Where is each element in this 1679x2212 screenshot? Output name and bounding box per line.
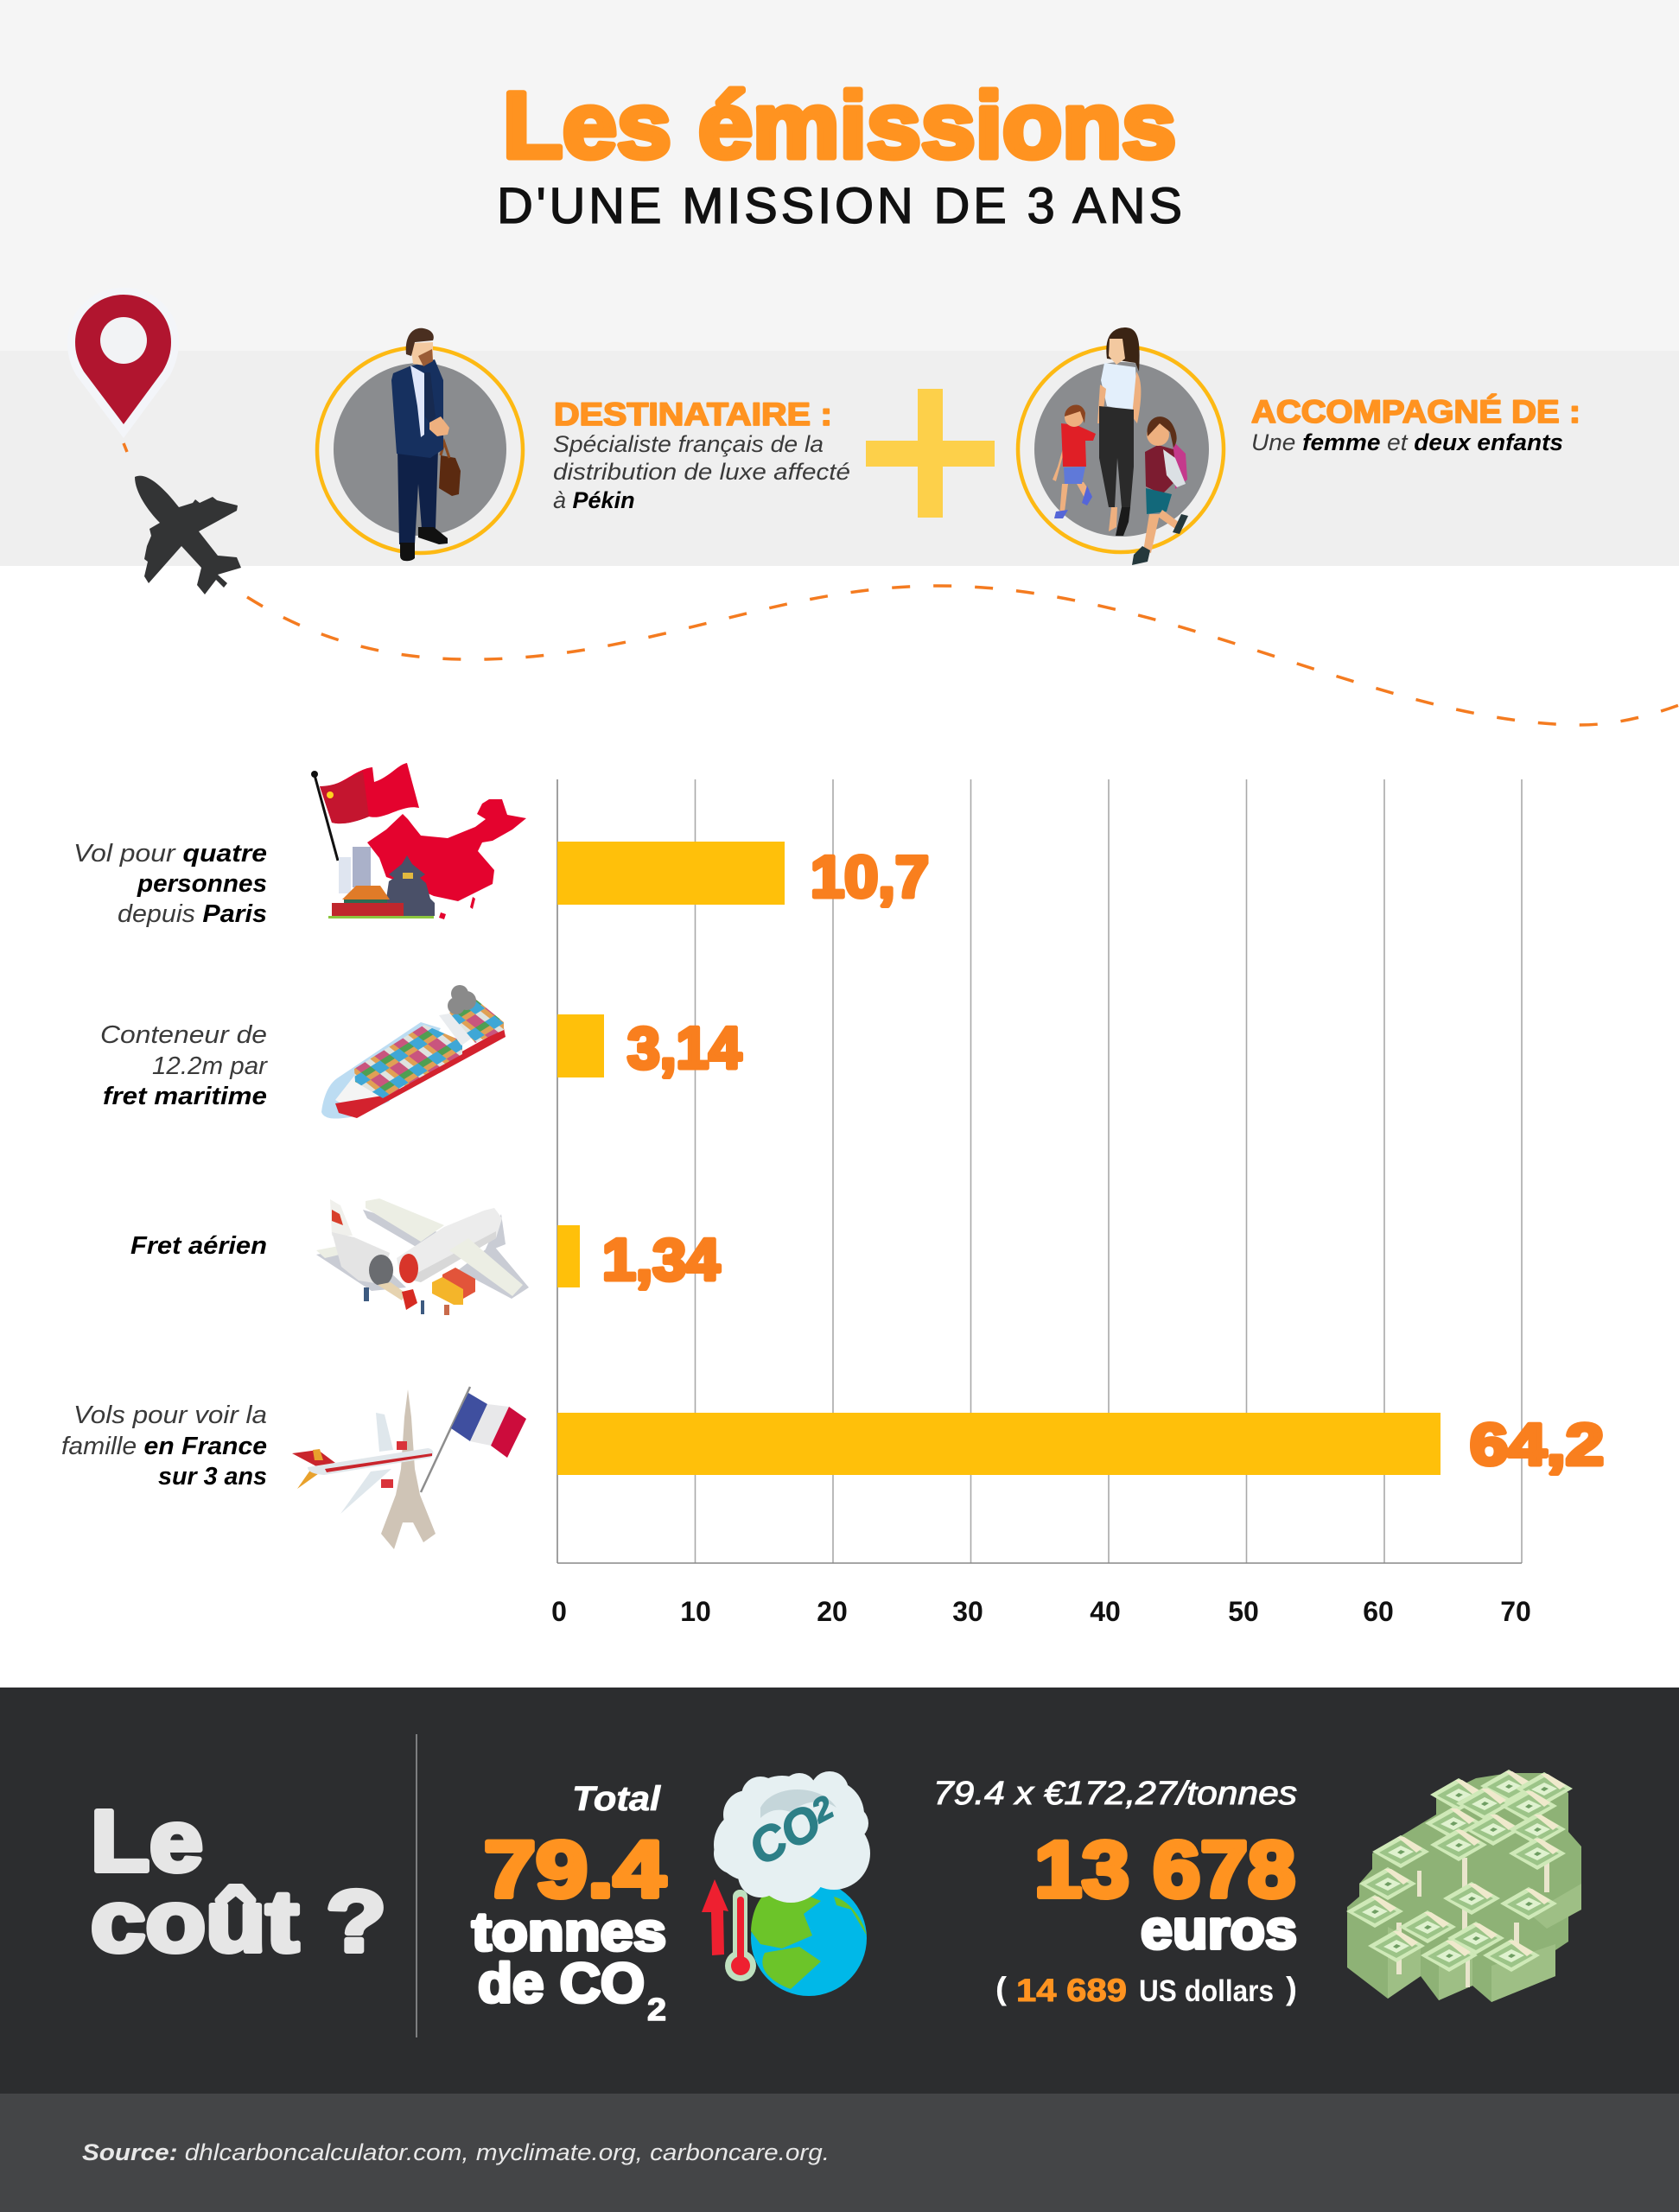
x axis labels: 30 (952, 1596, 983, 1627)
background: chart area (0, 566, 1679, 1688)
bar chart (551, 779, 1604, 1627)
x axis labels: 60 (1363, 1596, 1394, 1627)
row label: vols pour voir la famille: Vols pour voir la (73, 1402, 267, 1429)
text: US dollars equivalent: 14 689 (1016, 1973, 1127, 2008)
panel: le coût (0, 1688, 1679, 2094)
subtitle: D'UNE MISSION DE 3 ANS (497, 178, 1182, 234)
figure: woman and two children (1053, 327, 1188, 565)
portrait disc: family (1034, 362, 1209, 537)
bar: vol Paris (557, 842, 785, 905)
value: 64,2: 64,2 (1470, 1412, 1604, 1478)
text: accompagné description: Une femme et deux enfants (1251, 429, 1563, 455)
background: footer band (0, 2094, 1679, 2212)
title: Les émissions (503, 73, 1176, 177)
row label: vols pour voir la famille: famille en France (61, 1433, 267, 1460)
row label: vol pour quatre personnes: personnes (137, 870, 267, 898)
stat: 79.4: 79.4 (484, 1826, 665, 1914)
text: tonnes de CO2: de CO (478, 1952, 645, 2014)
divider (416, 1734, 417, 2037)
panel: accompagné de (1018, 327, 1580, 565)
portrait ring: man (317, 347, 523, 553)
icon: plus sign (866, 389, 995, 518)
icon: location pin (67, 288, 179, 452)
panel: destinataire (317, 328, 850, 561)
row label: conteneur fret maritime: 12.2m par (152, 1052, 268, 1080)
icon: China flag, map and monuments (311, 763, 526, 919)
icon: warming earth with CO2 cloud (702, 1771, 870, 1996)
x axis labels: 20 (817, 1596, 848, 1627)
text: total: Total (572, 1780, 661, 1818)
stat: 13 678: 13 678 (1034, 1826, 1295, 1914)
text: US dollars equivalent: ) (1286, 1971, 1297, 2006)
text: cost formula: 79.4 x €172,27/tonnes (933, 1776, 1297, 1812)
text: tonnes de CO2 (472, 1903, 666, 2027)
icon: Eiffel tower, airliner and French flag (292, 1387, 526, 1549)
text: tonnes de CO2: tonnes (472, 1903, 666, 1962)
background: dark cost band (0, 1688, 1679, 2094)
icon: stacks of banknotes (1346, 1770, 1581, 2002)
bar: fret maritime (557, 1014, 604, 1077)
row label: conteneur fret maritime: Conteneur de (100, 1021, 267, 1049)
x axis labels: 0 (551, 1596, 567, 1627)
text: tonnes de CO2: 2 (647, 1992, 666, 2027)
dashed flight path (247, 586, 1679, 725)
row label: conteneur fret maritime (100, 1021, 268, 1110)
x axis labels: 40 (1090, 1596, 1121, 1627)
icon: container ship (321, 985, 506, 1119)
text: destinataire description (553, 431, 850, 513)
icon: cargo plane (316, 1198, 529, 1315)
figure: businessman (391, 328, 461, 561)
x axis labels: 50 (1228, 1596, 1259, 1627)
text: destinataire description: distribution de luxe affecté (553, 459, 850, 485)
text: source: Source: dhlcarboncalculator.com, myclimate.org, carboncare.org. (82, 2139, 830, 2165)
icon: warming earth with CO2 cloud: CO (740, 1794, 830, 1876)
x axis labels: 70 (1500, 1596, 1531, 1627)
text: euros: euros (1141, 1898, 1297, 1961)
x axis labels: 10 (680, 1596, 711, 1627)
value: 3,14: 3,14 (627, 1015, 741, 1081)
icon: airplane (135, 476, 241, 594)
text: destinataire description: Spécialiste français de la (553, 431, 824, 457)
icon: warming earth with CO2 cloud: 2 (805, 1789, 839, 1830)
x axis labels (551, 1596, 1531, 1627)
value: 1,34: 1,34 (602, 1227, 720, 1293)
grid lines (557, 779, 1522, 1563)
heading: le coût: Le (91, 1793, 203, 1890)
panel: footer (0, 2094, 1679, 2212)
row label: vol pour quatre personnes: depuis Paris (118, 900, 267, 928)
row label: vol pour quatre personnes (73, 840, 267, 928)
text: US dollars equivalent: US dollars (1139, 1974, 1274, 2008)
text: destinataire description: à Pékin (553, 487, 635, 513)
row label: vols pour voir la famille: sur 3 ans (158, 1463, 267, 1491)
heading: accompagné de: ACCOMPAGNÉ DE : (1251, 394, 1580, 429)
text: US dollars equivalent: ( (995, 1971, 1008, 2006)
heading: le coût: coût ? (91, 1873, 386, 1970)
text: US dollars equivalent (995, 1971, 1297, 2008)
background: profile band (0, 351, 1679, 566)
row label: fret aérien: Fret aérien (130, 1232, 267, 1260)
row label: vols pour voir la famille (61, 1402, 267, 1491)
background: top header (0, 0, 1679, 351)
heading: le coût (91, 1793, 386, 1970)
row label: vol pour quatre personnes: Vol pour quatre (73, 840, 267, 868)
heading: destinataire: DESTINATAIRE : (554, 397, 832, 432)
row label: conteneur fret maritime: fret maritime (103, 1083, 267, 1110)
portrait disc: man (334, 363, 506, 536)
portrait ring: family (1018, 346, 1224, 552)
value: 10,7: 10,7 (811, 844, 929, 910)
bar: vols famille (557, 1413, 1441, 1475)
bar: fret aérien (557, 1225, 580, 1287)
